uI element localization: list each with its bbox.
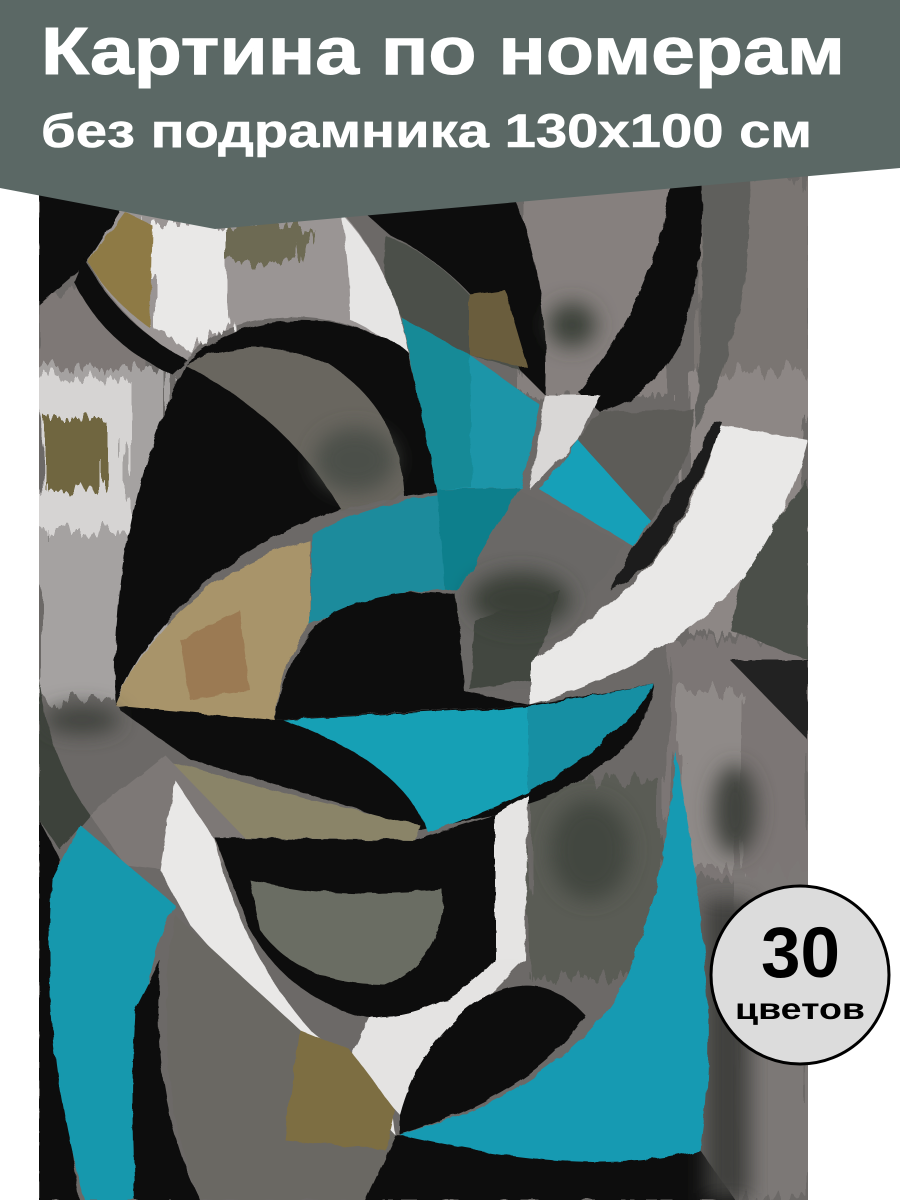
title: Картина по номерам (41, 14, 845, 89)
painting: centre grey and black semicircle (275, 420, 722, 720)
painting: top white band (88, 210, 408, 362)
painting: dark mottled patches (44, 303, 757, 900)
subtitle: без подрамника 130х100 см (41, 104, 812, 157)
painting: grey background patches (39, 176, 810, 1200)
badge: 30 colours: 30 (761, 914, 840, 993)
painting: big teal crescent (400, 750, 708, 1162)
painting: lower black ribbon (90, 685, 655, 1135)
painting: lower left grey and ochre (132, 944, 735, 1200)
badge: 30 colours: цветов (735, 993, 865, 1026)
painting: teal upper fan (310, 318, 650, 625)
painting: white swoosh (530, 425, 808, 705)
painting: lower right dark shading (705, 900, 750, 1200)
painting: teal centre crescent (283, 685, 655, 832)
painting: black band and dome (74, 258, 440, 705)
painting: abstract composition (39, 176, 810, 1200)
badge: 30 colours (711, 886, 889, 1064)
painting: teal left blade (49, 825, 175, 1200)
painting: dark background masses (39, 176, 808, 1200)
painting: tan wedge (115, 540, 310, 720)
header banner (0, 0, 900, 229)
painting: dome green shading (315, 428, 395, 492)
